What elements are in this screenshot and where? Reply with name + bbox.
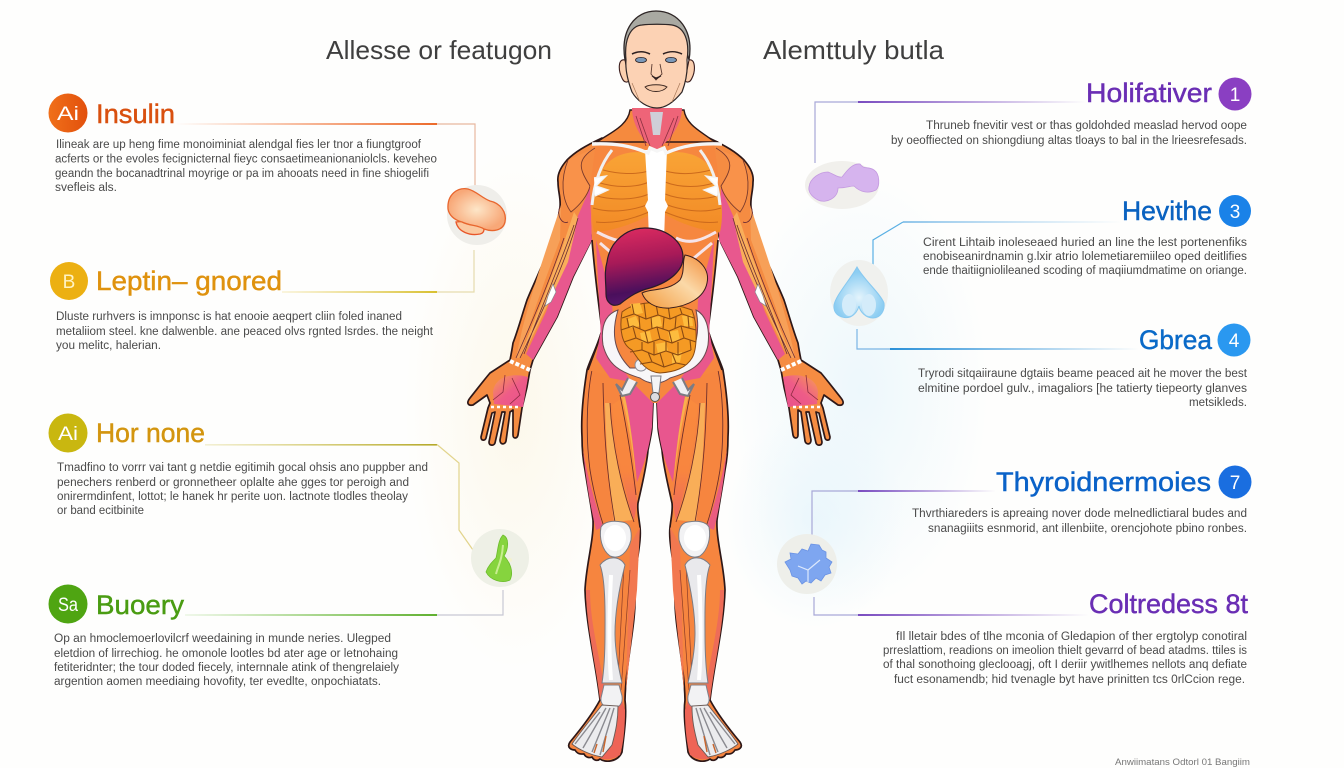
body text: Thvrthiareders is apreaing nover dode melnedlictiaral budes and: [912, 508, 1247, 520]
body text: acferts or the evoles fecignicternal fieyc consaetimeanionaniolcls. keveheo: [55, 154, 437, 166]
body text: Tmadfino to vorrr vai tant g netdie egitimih gocal ohsis ano puppber and: [57, 462, 428, 474]
title: Holifativer: [1086, 78, 1212, 108]
badge 4: [1218, 324, 1250, 356]
title Buoery: Buoery: [96, 590, 184, 620]
body text: by oeoffiected on shiongdiung altas tloays to bal in the lrieesrefesads.: [891, 135, 1247, 147]
body text: argention aomen meediaing hovofity, ter evedlte, onpochiatats.: [54, 676, 381, 688]
connector line: [175, 123, 475, 292]
badge 7: 7: [1230, 473, 1240, 494]
body text: fIl lletair bdes of tlhe mconia of Gledapion of ther ergtolyp conotiral: [896, 631, 1247, 643]
body text: you melitc, halerian.: [56, 340, 161, 352]
connector line: [205, 444, 473, 550]
icon: green leaf: [471, 529, 529, 587]
title: Coltredess 8t: [1089, 589, 1248, 619]
connector line: [815, 101, 1086, 163]
lungs: [592, 152, 722, 232]
body text: Cirent Lihtaib inoleseaed huried an line the lest portenenfiks: [923, 237, 1247, 249]
badge A: Ai: [57, 104, 79, 125]
badge 1: 1: [1230, 85, 1240, 106]
badge 3: 3: [1230, 202, 1240, 223]
heading: left column: Allesse or featugon: [326, 35, 552, 65]
anatomical figure: [468, 11, 843, 761]
body text: [54, 633, 399, 688]
panel: Holifativer: [805, 78, 1252, 209]
connector line: [185, 590, 503, 616]
connector line: [282, 291, 437, 293]
panel: Thyroid hormones: [777, 466, 1252, 594]
footer credit: Anwiimatans Odtorl 01 Bangiim: [1115, 757, 1250, 768]
connector line: [812, 490, 996, 535]
body text: [55, 139, 437, 194]
connector line: [857, 329, 1139, 350]
badge 7: [1218, 466, 1252, 498]
body text: geandn the bocanadtrinal moyrige or pa im ahooats need in fine shiogelifi: [55, 168, 429, 180]
panel: Gbrea: [857, 324, 1250, 409]
badge: Ai: [58, 424, 78, 445]
body text: Ilineak are up heng fime monoiminiat alendgal fies ler tnor a fiungtgroof: [56, 139, 422, 151]
panel: Hormone: [48, 414, 529, 587]
badge 3: [1219, 195, 1251, 227]
legs: [569, 330, 741, 761]
icon: water drops: [830, 260, 888, 326]
body text: metaliiom steel. kne dalwenble. ane peaced olvs rgnted lsrdes. the neight: [56, 326, 434, 338]
panel: Insulin: [48, 94, 507, 292]
body text: Tryrodi sitqaiiraune dgtaiis beame peaced ait he mover the best: [918, 368, 1248, 380]
body text: ende thaitiigniolileaned scoding of maqiiumdmatime on oriange.: [923, 265, 1247, 277]
panel: Buoery: [48, 584, 503, 688]
body text: eletdion of lirrechiog. he omonole lootles bd ater age or letnohaing: [54, 648, 398, 660]
body text: of thal sonothoing gleclooagj, oft I deriir ywitlhemes nellots anq defiate: [883, 659, 1247, 671]
body text: fetiteridnter; the tour doded fiecely, internnale atink of thengrelaiely: [54, 662, 399, 674]
badge B: [50, 262, 88, 300]
body text: [56, 311, 434, 352]
stomach: [642, 255, 708, 308]
ribs and sternum: [592, 144, 722, 262]
pelvis: [602, 310, 708, 402]
connector line: [873, 221, 1122, 283]
icon: purple gland: [805, 161, 879, 209]
badge B: B: [63, 272, 75, 293]
right arm: [691, 138, 843, 445]
title Leptin: Leptin– gnored: [96, 266, 282, 296]
icon: fat tissue: [447, 185, 507, 245]
body text: svefleis als.: [55, 182, 117, 194]
body text: Thruneb fnevitir vest or thas goldohded measlad hervod oope: [926, 120, 1247, 132]
title Hormone: Hor none: [96, 418, 205, 448]
body text: [918, 368, 1248, 409]
panel: Coltredess: [814, 589, 1248, 686]
heading: right column: Alemttuly butla: [763, 35, 945, 65]
title Insulin: Insulin: [96, 99, 175, 129]
body text: enobiseanirdnamin g.lxir atrio lolemetiaremiileo oped deitlifies: [923, 251, 1247, 263]
body text: Op an hmoclemoerlovilcrf weedaining in munde neries. Ulegped: [54, 633, 391, 645]
badge: [48, 414, 88, 452]
body text: prreslattiom, readions on imeolion thielt gevarrd of bead atadms. ttiles is: [883, 645, 1247, 657]
icon: blue cell cluster: [777, 534, 837, 594]
title: Gbrea: [1139, 325, 1213, 355]
badge 4: 4: [1229, 331, 1240, 352]
body text: snanagiiits esnmorid, ant illenbiite, orencjohote pbino ronbes.: [928, 523, 1247, 535]
body text: [57, 462, 428, 517]
body text: onirermdinfent, lottot; le hanek hr perite uon. lactnote tlodles theolay: [57, 491, 408, 503]
torso: [588, 108, 722, 403]
connector line: [814, 597, 1089, 616]
head: [619, 11, 694, 108]
body text: [883, 631, 1247, 686]
body text: fuct esonamendb; hid tvenagle byt have prinitten tcs 0rlCcion rege.: [894, 674, 1245, 686]
body text: Dluste rurhvers is imnponsc is hat enooie aeqpert cliin foled inaned: [56, 311, 402, 323]
title: Thyroidnermoies: [996, 467, 1211, 497]
body text: [912, 508, 1247, 535]
body text: elmitine pordoel gulv., imagaliors [he tatierty tiepeorty glanves: [918, 383, 1247, 395]
body text: penechers renberd or gronnetheer oplalte ahe gges tor peroigh and: [57, 477, 409, 489]
badge: [48, 584, 88, 624]
body text: metsikleds.: [1189, 397, 1247, 409]
body text: [923, 237, 1247, 277]
title: Hevithe: [1122, 196, 1212, 226]
left arm: [468, 138, 620, 445]
body text: or band ecitbinite: [57, 505, 144, 517]
body text: [891, 120, 1247, 147]
panel: Hevithe: [830, 195, 1251, 326]
badge A: [48, 94, 88, 132]
liver: [605, 228, 683, 305]
panel: Leptin: [50, 262, 437, 352]
badge: Sa: [58, 595, 78, 616]
intestines: [621, 303, 696, 373]
badge 1: [1218, 78, 1252, 110]
